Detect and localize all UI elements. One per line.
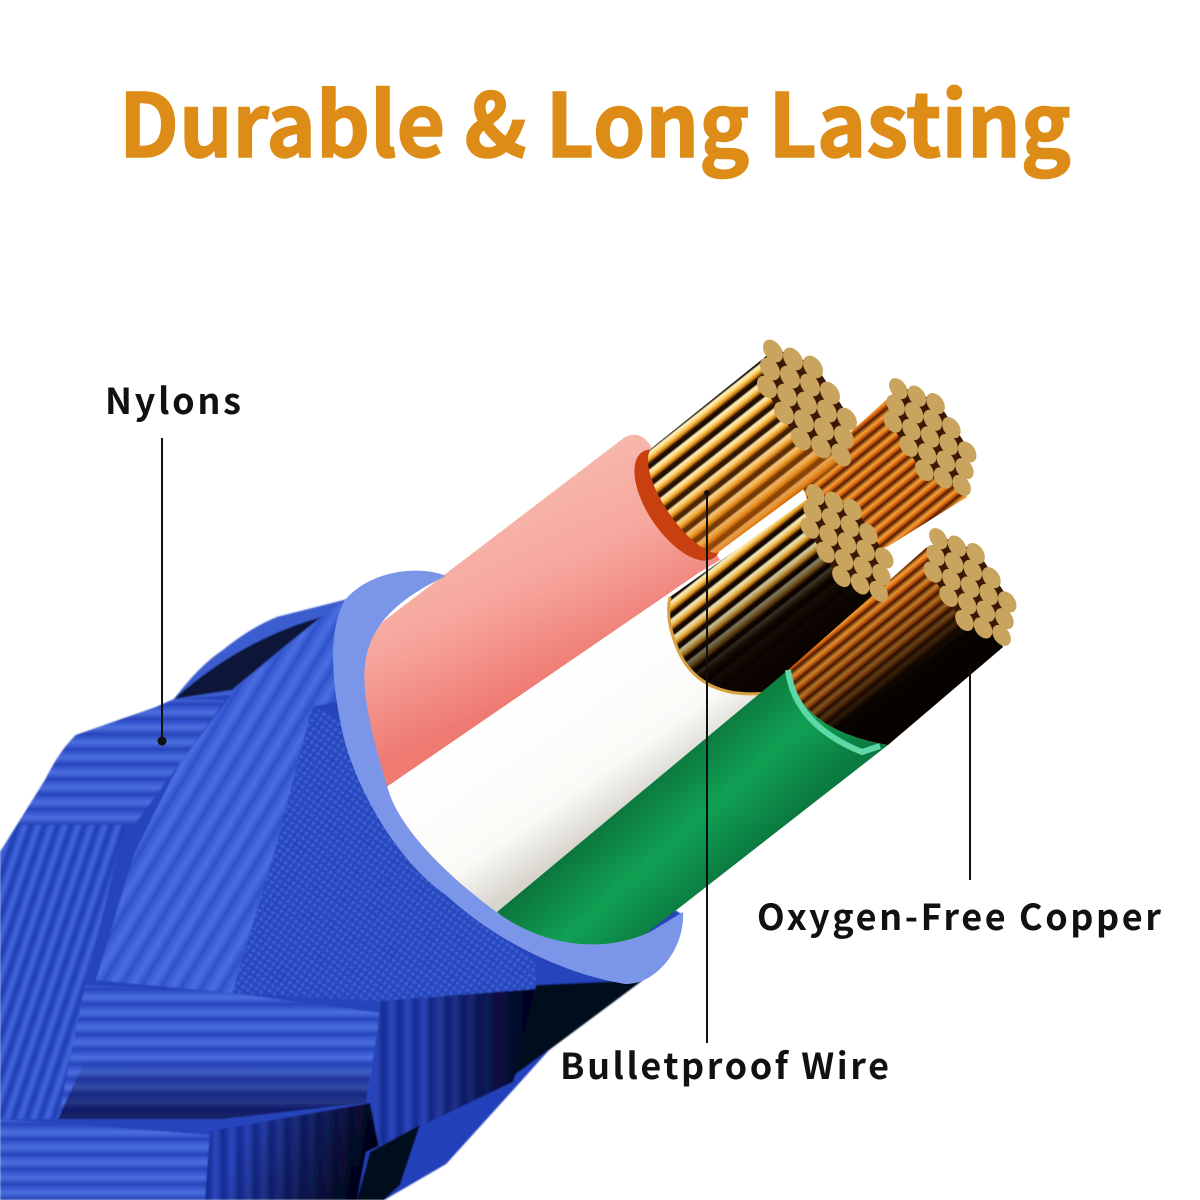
strand: central diagonal band [96,599,348,993]
pink wire inner rim [617,435,739,575]
strand: far-left diagonal band [0,825,125,1119]
title: Durable & Long Lasting [119,56,1071,183]
leader: Bulletproof Wire [704,490,710,1043]
green wire [497,670,888,950]
pink wire [358,435,720,790]
strand: bottom left band [0,1119,210,1200]
black shadow wedge [513,980,643,1076]
label: Oxygen-Free Copper: Oxygen-Free Copper [757,889,1161,941]
green wire rim [788,670,880,752]
leader: Oxygen-Free Copper [969,668,971,880]
strand: horizontal lower band [58,985,380,1119]
strand: bottom centre band [205,1103,384,1200]
copper bundle: rear [800,375,980,560]
strand: upper-left horizontal band [17,699,225,825]
strand: right lower band [370,989,536,1152]
label: Bulletproof Wire: Bulletproof Wire [560,1038,889,1090]
leader: Nylons [158,438,166,746]
label: Nylons: Nylons [105,373,241,425]
sleeve lower edge [357,1050,549,1200]
white wire [385,572,800,925]
copper bundle: pink wire [648,336,861,553]
top lobe and dark slit [174,599,348,699]
braided nylon sleeve [0,599,683,1200]
copper bundle: green wire [788,525,1020,745]
sleeve end ring [333,571,683,984]
dark fold at sleeve base [357,1125,420,1200]
copper bundle: white wire [669,497,893,694]
strand: fine woven texture [232,707,536,1001]
copper end face: white wire [797,481,897,605]
